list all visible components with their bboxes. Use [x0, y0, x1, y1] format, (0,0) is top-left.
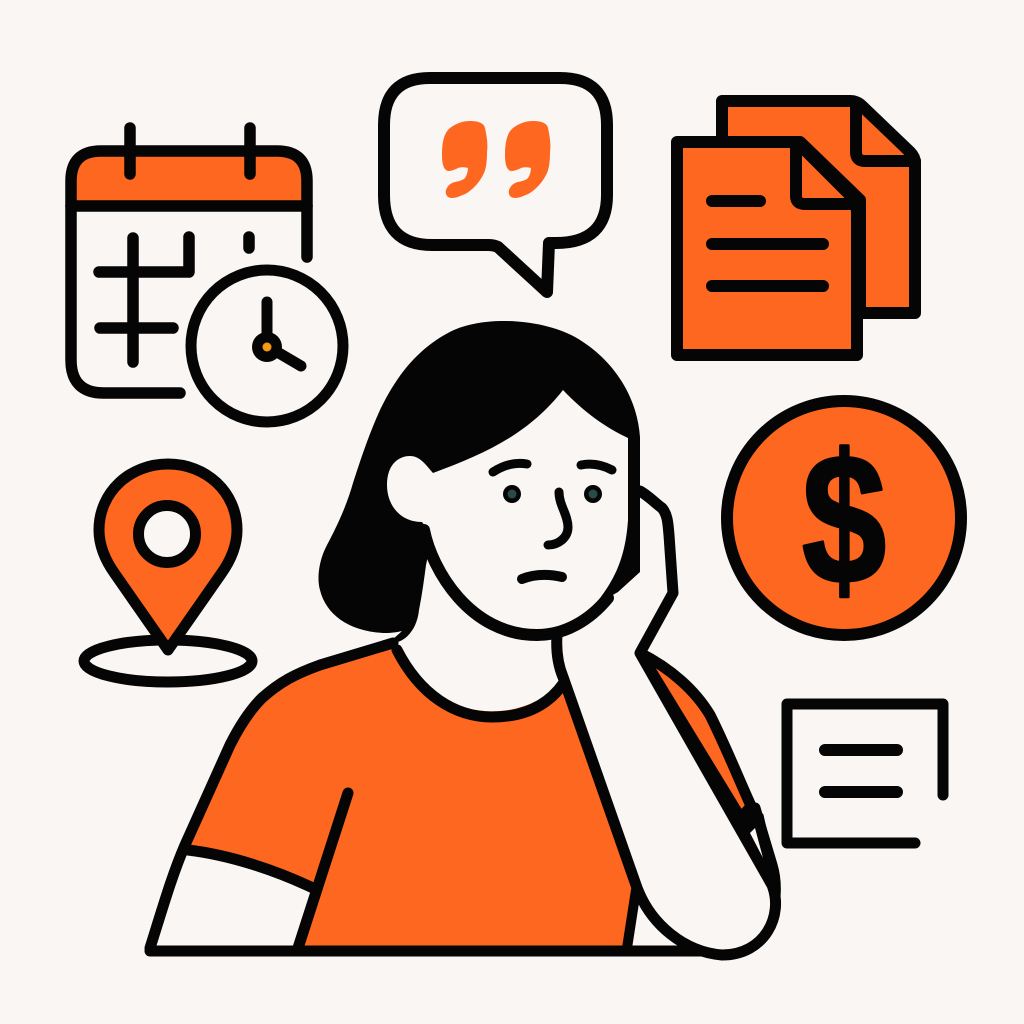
jaw line [424, 530, 608, 635]
shoulder and torso outline [150, 643, 393, 948]
far sleeve [640, 653, 760, 825]
mouth [522, 575, 562, 579]
back document [722, 101, 915, 313]
icon: documents [677, 101, 915, 355]
shirt [185, 643, 635, 951]
icon: speech bubble with quotes [384, 78, 607, 292]
face right edge [595, 437, 640, 605]
icon: clock [191, 270, 343, 422]
far sleeve sliver [750, 828, 763, 858]
eyes [503, 485, 602, 503]
far sleeve outer edge [755, 808, 775, 897]
sleeve hem [188, 850, 313, 888]
eyebrows [493, 463, 612, 472]
front document [677, 142, 857, 355]
supporting arm and hand [557, 485, 776, 955]
icon: note card [787, 704, 943, 843]
figure: woman [150, 321, 776, 955]
nose [548, 492, 568, 545]
collar [397, 650, 563, 717]
far sleeve band [738, 805, 775, 885]
sleeve seam [298, 793, 348, 948]
hair [318, 321, 640, 643]
quote marks [442, 121, 550, 198]
icon: dollar coin: $ [802, 416, 886, 622]
base line [150, 946, 700, 956]
icon: calendar [71, 128, 307, 393]
icon: location pin [84, 464, 252, 682]
face and ear [387, 390, 628, 629]
torso right edge [627, 890, 636, 948]
icon: dollar coin [727, 401, 961, 635]
